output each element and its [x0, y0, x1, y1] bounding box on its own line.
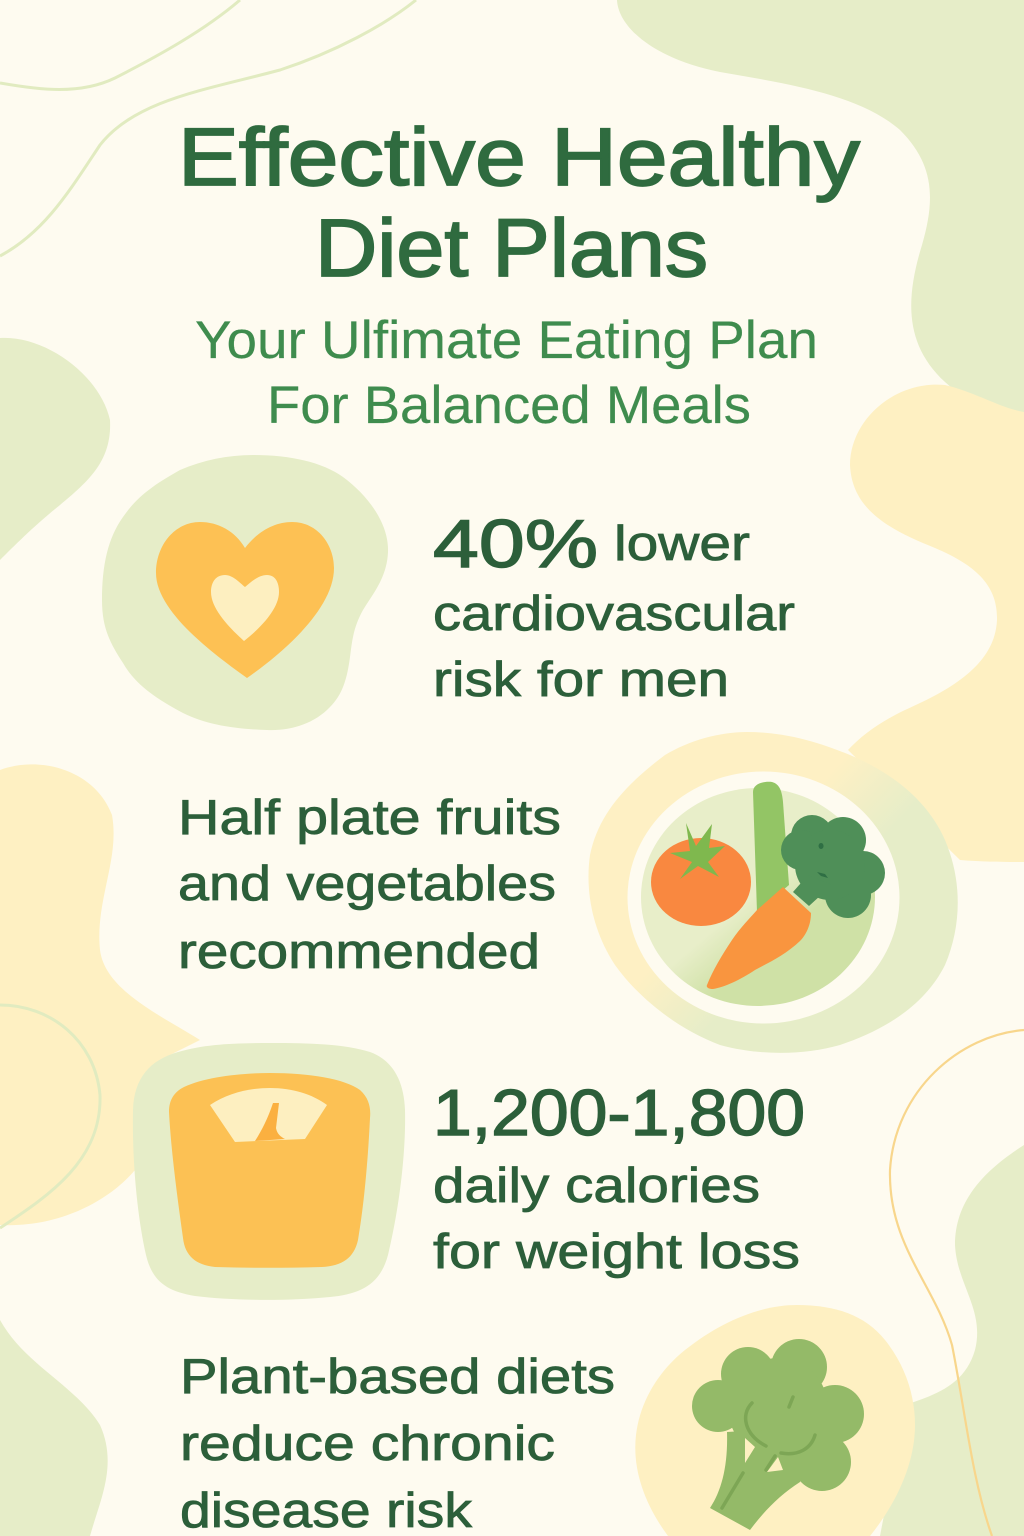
carrot	[707, 887, 811, 989]
title: Effective Healthy	[178, 112, 860, 203]
stat text: plant-based diets reduce chronic disease risk	[180, 1350, 615, 1536]
subtitle	[195, 311, 818, 435]
panel: daily calories	[133, 1043, 805, 1300]
panel: half plate	[178, 732, 958, 1053]
stat text: 40% lower cardiovascular risk for men: risk for men	[433, 653, 729, 707]
broccoli	[781, 815, 885, 918]
broccoli spots	[817, 843, 828, 878]
tomato leaves	[670, 823, 725, 879]
stat text: half plate fruits and vegetables: recommended	[178, 925, 540, 979]
stat text: plant-based diets reduce chronic disease risk: Plant-based diets	[180, 1350, 615, 1404]
subtitle: For Balanced Meals	[267, 376, 751, 435]
stat text: half plate fruits and vegetables: Half plate fruits	[178, 791, 561, 845]
icon: bathroom scale	[133, 1043, 405, 1300]
stat text: 1,200-1,800 daily calories for weight loss: daily calories	[433, 1159, 760, 1213]
icon: broccoli	[635, 1305, 915, 1536]
tomato	[651, 838, 751, 926]
stat text: half plate fruits and vegetables	[178, 791, 561, 979]
stat text: half plate fruits and vegetables: and vegetables	[178, 857, 556, 911]
subtitle: Your Ulfimate Eating Plan	[195, 311, 818, 370]
celery	[753, 782, 789, 912]
icon: plate of vegetables	[588, 732, 958, 1053]
stat text: 40% lower cardiovascular risk for men	[433, 506, 795, 707]
stat text: 1,200-1,800 daily calories for weight loss: 1,200-1,800	[433, 1076, 805, 1149]
stat text: 40% lower cardiovascular risk for men: 40%	[433, 506, 598, 582]
panel: cardiovascular risk	[102, 455, 795, 730]
title: Diet Plans	[315, 203, 708, 294]
stat text: plant-based diets reduce chronic disease risk: reduce chronic	[180, 1417, 555, 1471]
title	[178, 112, 860, 294]
stat text: 1,200-1,800 daily calories for weight loss: for weight loss	[433, 1225, 800, 1279]
icon: heart	[102, 455, 388, 730]
panel: plant-based diets	[180, 1305, 915, 1536]
stat text: 40% lower cardiovascular risk for men: cardiovascular	[433, 587, 795, 641]
stat text: 40% lower cardiovascular risk for men: lower	[614, 517, 750, 571]
stat text: 1,200-1,800 daily calories for weight loss	[433, 1076, 805, 1279]
